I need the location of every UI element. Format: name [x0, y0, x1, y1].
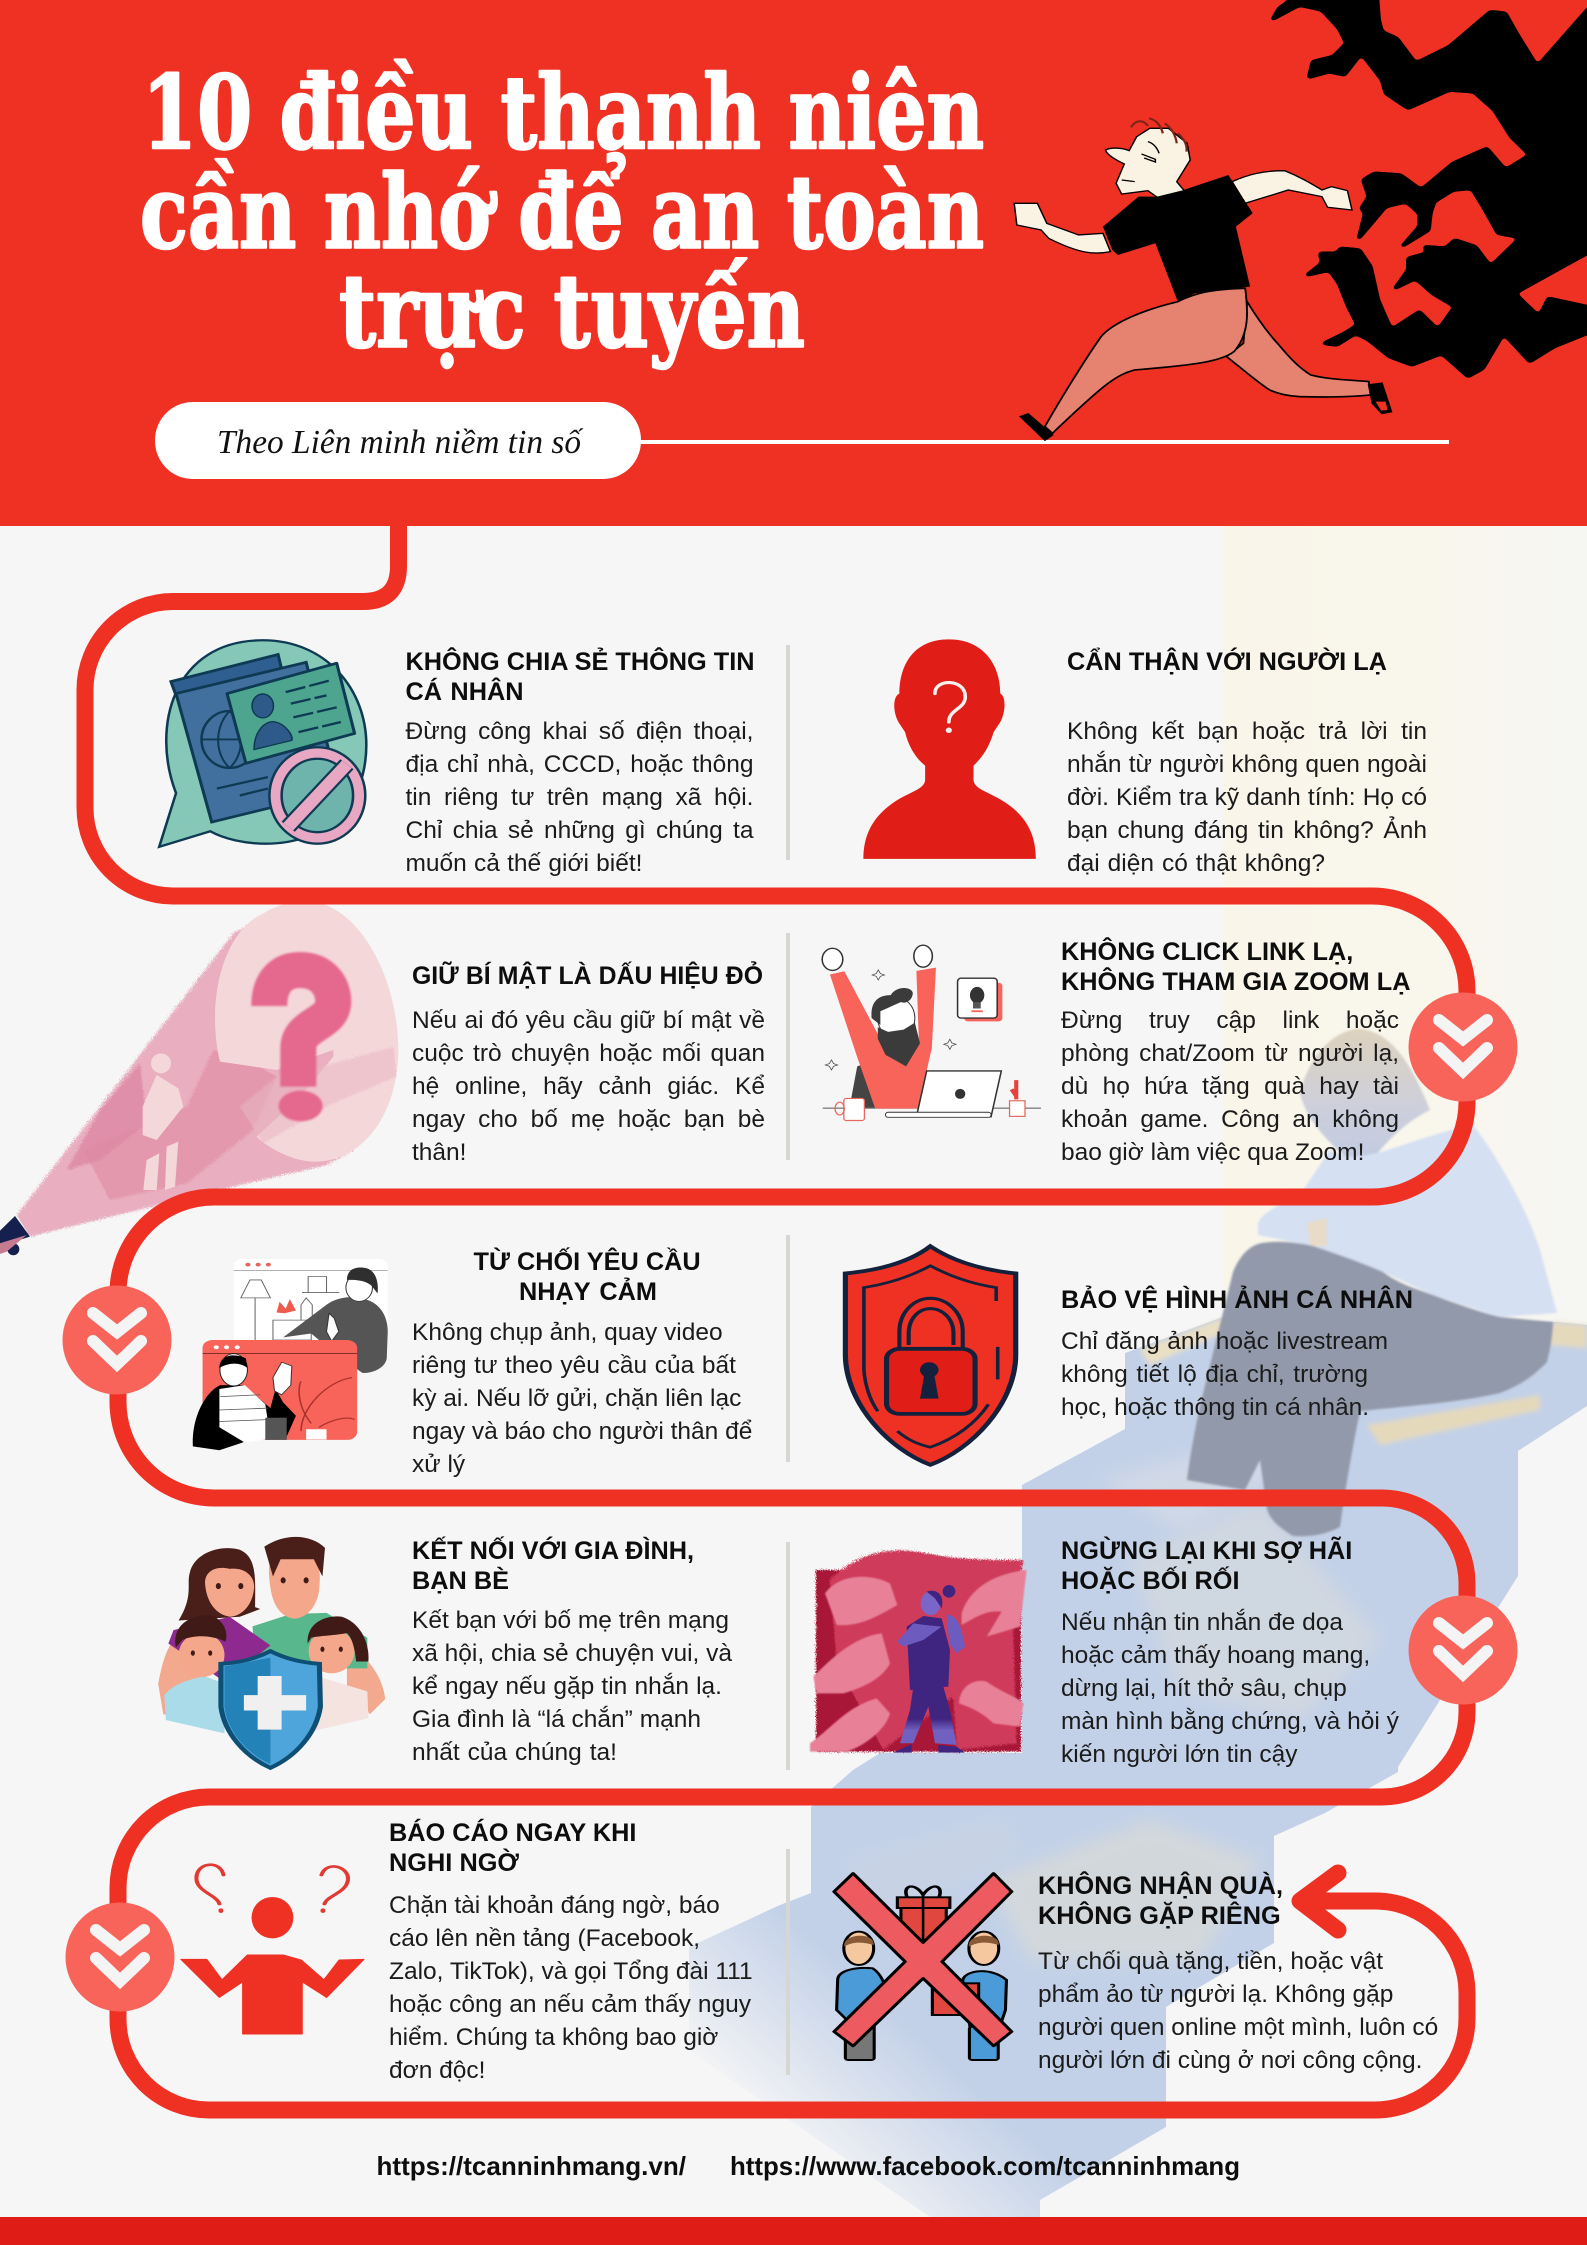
text: item 10: phẩm ảo từ người lạ. Không gặp — [1038, 1980, 1393, 2008]
text: item 10: người lớn đi cùng ở nơi công cộng. — [1038, 2046, 1422, 2074]
title: 10 điều thanh niên — [142, 53, 984, 172]
heading: item 10: KHÔNG GẶP RIÊNG — [1038, 1902, 1281, 1930]
text: item 8: hoặc cảm thấy hoang mang, — [1061, 1642, 1370, 1669]
text: item 2: đời. Kiểm tra kỹ danh tính: Họ có — [1067, 784, 1427, 810]
icon: unknown person — [863, 639, 1036, 859]
text: item 5: riêng tư theo yêu cầu của bất — [412, 1352, 736, 1379]
heading: item 3: GIỮ BÍ MẬT LÀ DẤU HIỆU ĐỎ — [412, 963, 763, 990]
text: item 8: dừng lại, hít thở sâu, chụp — [1061, 1675, 1347, 1702]
text: item 7: Gia đình là “lá chắn” mạnh — [412, 1706, 701, 1733]
connector path — [85, 526, 1467, 2110]
text: item 2: nhắn từ người không quen ngoài — [1067, 750, 1427, 778]
badge: chevron 1 — [1408, 992, 1518, 1102]
text: item 2: bạn chung đáng tin không? Ảnh — [1067, 816, 1427, 844]
icon: spotlight with question mark — [0, 901, 398, 1255]
icon: no gifts or private meetings — [834, 1873, 1012, 2060]
heading: item 6: BẢO VỆ HÌNH ẢNH CÁ NHÂN — [1061, 1286, 1413, 1314]
header band — [0, 0, 1587, 526]
icon: man celebrating at laptop — [822, 945, 1041, 1121]
text: item 4 — [1061, 1007, 1399, 1166]
text: item 4: dù họ hứa tặng quà hay tài — [1061, 1073, 1399, 1100]
heading: item 4 — [1061, 937, 1410, 996]
heading: item 2: CẨN THẬN VỚI NGƯỜI LẠ — [1067, 648, 1387, 676]
illustration: monster shadow — [1273, 0, 1587, 377]
badge: chevron 2 — [62, 1286, 172, 1394]
text: item 9: cáo lên nền tảng (Facebook, — [389, 1925, 700, 1952]
heading: item 9: NGHI NGỜ — [389, 1849, 519, 1877]
text: item 6: không tiết lộ địa chỉ, trường — [1061, 1361, 1368, 1388]
footer band — [0, 2217, 1587, 2245]
text: item 5: xử lý — [412, 1451, 465, 1478]
heading: item 1: CÁ NHÂN — [406, 678, 524, 706]
text: item 3: hệ online, hãy cảnh giác. Kể — [412, 1073, 765, 1100]
text: item 1: Đừng công khai số điện thoại, — [406, 718, 754, 744]
heading: item 4: KHÔNG THAM GIA ZOOM LẠ — [1061, 968, 1410, 996]
background: person sitting on stairs — [689, 526, 1587, 2217]
text: item 3 — [412, 1007, 765, 1166]
text: item 1: địa chỉ nhà, CCCD, hoặc thông — [406, 750, 754, 778]
icon: personal information blocked — [159, 640, 366, 847]
text: item 8: màn hình bằng chứng, và hỏi ý — [1061, 1708, 1399, 1735]
text: item 3: thân! — [412, 1139, 466, 1166]
front leg — [1045, 288, 1247, 433]
text: item 9: Chặn tài khoản đáng ngờ, báo — [389, 1892, 720, 1919]
heading: item 1: KHÔNG CHIA SẺ THÔNG TIN — [406, 648, 755, 676]
text: item 1: tin riêng tư trên mạng xã hội. — [406, 784, 754, 810]
arrow head — [1300, 1873, 1338, 1930]
text: item 3: ngay cho bố mẹ hoặc bạn bè — [412, 1106, 765, 1133]
text: item 8 — [1061, 1608, 1399, 1768]
footer links: https://tcanninhmang.vn/ — [376, 2153, 686, 2181]
text: item 7: Kết bạn với bố mẹ trên mạng — [412, 1607, 729, 1634]
text: item 6: Chỉ đăng ảnh hoặc livestream — [1061, 1328, 1388, 1355]
heading: item 4: KHÔNG CLICK LINK LẠ, — [1061, 938, 1353, 966]
text: item 5: kỳ ai. Nếu lỡ gửi, chặn liên lạc — [412, 1385, 741, 1412]
footer links — [376, 2153, 1240, 2181]
icon: shield with padlock — [845, 1246, 1016, 1465]
trousers — [1187, 1242, 1553, 1536]
title: trực tuyến — [339, 252, 805, 370]
icon: frightened woman surrounded by hands — [810, 1550, 1027, 1753]
heading: item 10 — [1038, 1871, 1283, 1930]
heading: item 9: BÁO CÁO NGAY KHI — [389, 1819, 636, 1847]
text: item 5: Không chụp ảnh, quay video — [412, 1319, 723, 1346]
subtitle pill: Theo Liên minh niềm tin số — [217, 424, 584, 461]
text: item 7 — [412, 1607, 732, 1766]
text: item 3: Nếu ai đó yêu cầu giữ bí mật về — [412, 1007, 765, 1034]
text: item 6 — [1061, 1328, 1388, 1421]
text: item 1: muốn cả thế giới biết! — [406, 850, 642, 876]
text: item 8: Nếu nhận tin nhắn đe dọa — [1061, 1609, 1343, 1636]
text: item 2 — [1067, 718, 1427, 876]
heading: item 1 — [406, 647, 755, 706]
icon: shrugging person with question marks — [181, 1865, 364, 2034]
shirt — [1103, 175, 1253, 302]
heading: item 9 — [389, 1818, 636, 1877]
text: item 7: nhất của chúng ta! — [412, 1739, 617, 1766]
rear leg — [1227, 302, 1371, 397]
title: cần nhớ để an toàn — [140, 152, 984, 272]
heading: item 5: TỪ CHỐI YÊU CẦU — [474, 1248, 701, 1276]
text: item 10: người quen online một mình, luôn có — [1038, 2014, 1438, 2040]
heading: item 7: BẠN BÈ — [412, 1567, 509, 1595]
text: item 4: phòng chat/Zoom từ người lạ, — [1061, 1040, 1399, 1067]
subtitle line — [630, 440, 1449, 444]
icon: family with shield — [158, 1537, 385, 1768]
text: item 9: hiểm. Chúng ta không bao giờ — [389, 2024, 718, 2051]
badge: chevron 4 — [66, 1902, 174, 2012]
text: item 7: kể ngay nếu gặp tin nhắn lạ. — [412, 1673, 722, 1700]
text: item 6: học, hoặc thông tin cá nhân. — [1061, 1394, 1369, 1421]
shoes — [1021, 414, 1052, 440]
title — [140, 53, 984, 370]
text: item 7: xã hội, chia sẻ chuyện vui, và — [412, 1640, 732, 1667]
heading: item 5 — [474, 1247, 701, 1306]
text: item 4: bao giờ làm việc qua Zoom! — [1061, 1139, 1364, 1166]
head — [1106, 128, 1190, 197]
text: item 5 — [412, 1319, 752, 1478]
text: item 9: đơn độc! — [389, 2057, 485, 2084]
text: item 3: cuộc trò chuyện hoặc mối quan — [412, 1040, 765, 1067]
text: item 2: đại diện có thật không? — [1067, 850, 1325, 876]
hair and head — [1300, 1029, 1430, 1172]
text: item 1 — [406, 718, 754, 876]
heading: item 8 — [1061, 1536, 1352, 1595]
text: item 4: Đừng truy cập link hoặc — [1061, 1007, 1399, 1034]
text: item 9: Zalo, TikTok), và gọi Tổng đài 111 — [389, 1958, 753, 1985]
text: item 4: khoản game. Công an không — [1061, 1106, 1399, 1133]
icon: refusing sensitive requests — [193, 1259, 388, 1450]
text: item 2: Không kết bạn hoặc trả lời tin — [1067, 718, 1427, 744]
arms — [1014, 203, 1110, 253]
footer links: https://www.facebook.com/tcanninhmang — [730, 2153, 1240, 2181]
text: item 1: Chỉ chia sẻ những gì chúng ta — [406, 816, 754, 844]
heading: item 7: KẾT NỐI VỚI GIA ĐÌNH, — [412, 1537, 694, 1565]
sweater — [1258, 1125, 1557, 1317]
illustration: running man — [1014, 118, 1391, 440]
heading: item 7 — [412, 1536, 694, 1595]
heading: item 10: KHÔNG NHẬN QUÀ, — [1038, 1872, 1283, 1900]
text: item 9 — [389, 1892, 753, 2084]
text: item 5: ngay và báo cho người thân để — [412, 1418, 752, 1445]
text: item 10: Từ chối quà tặng, tiền, hoặc vật — [1038, 1948, 1383, 1974]
text: item 8: kiến người lớn tin cậy — [1061, 1741, 1297, 1768]
text: item 10 — [1038, 1948, 1438, 2074]
heading: item 5: NHẠY CẢM — [519, 1278, 657, 1306]
text: item 9: hoặc công an nếu cảm thấy nguy — [389, 1991, 751, 2018]
badge: chevron 3 — [1408, 1596, 1518, 1704]
heading: item 8: HOẶC BỐI RỐI — [1061, 1567, 1240, 1595]
subtitle pill — [155, 402, 641, 479]
heading: item 8: NGỪNG LẠI KHI SỢ HÃI — [1061, 1537, 1352, 1565]
